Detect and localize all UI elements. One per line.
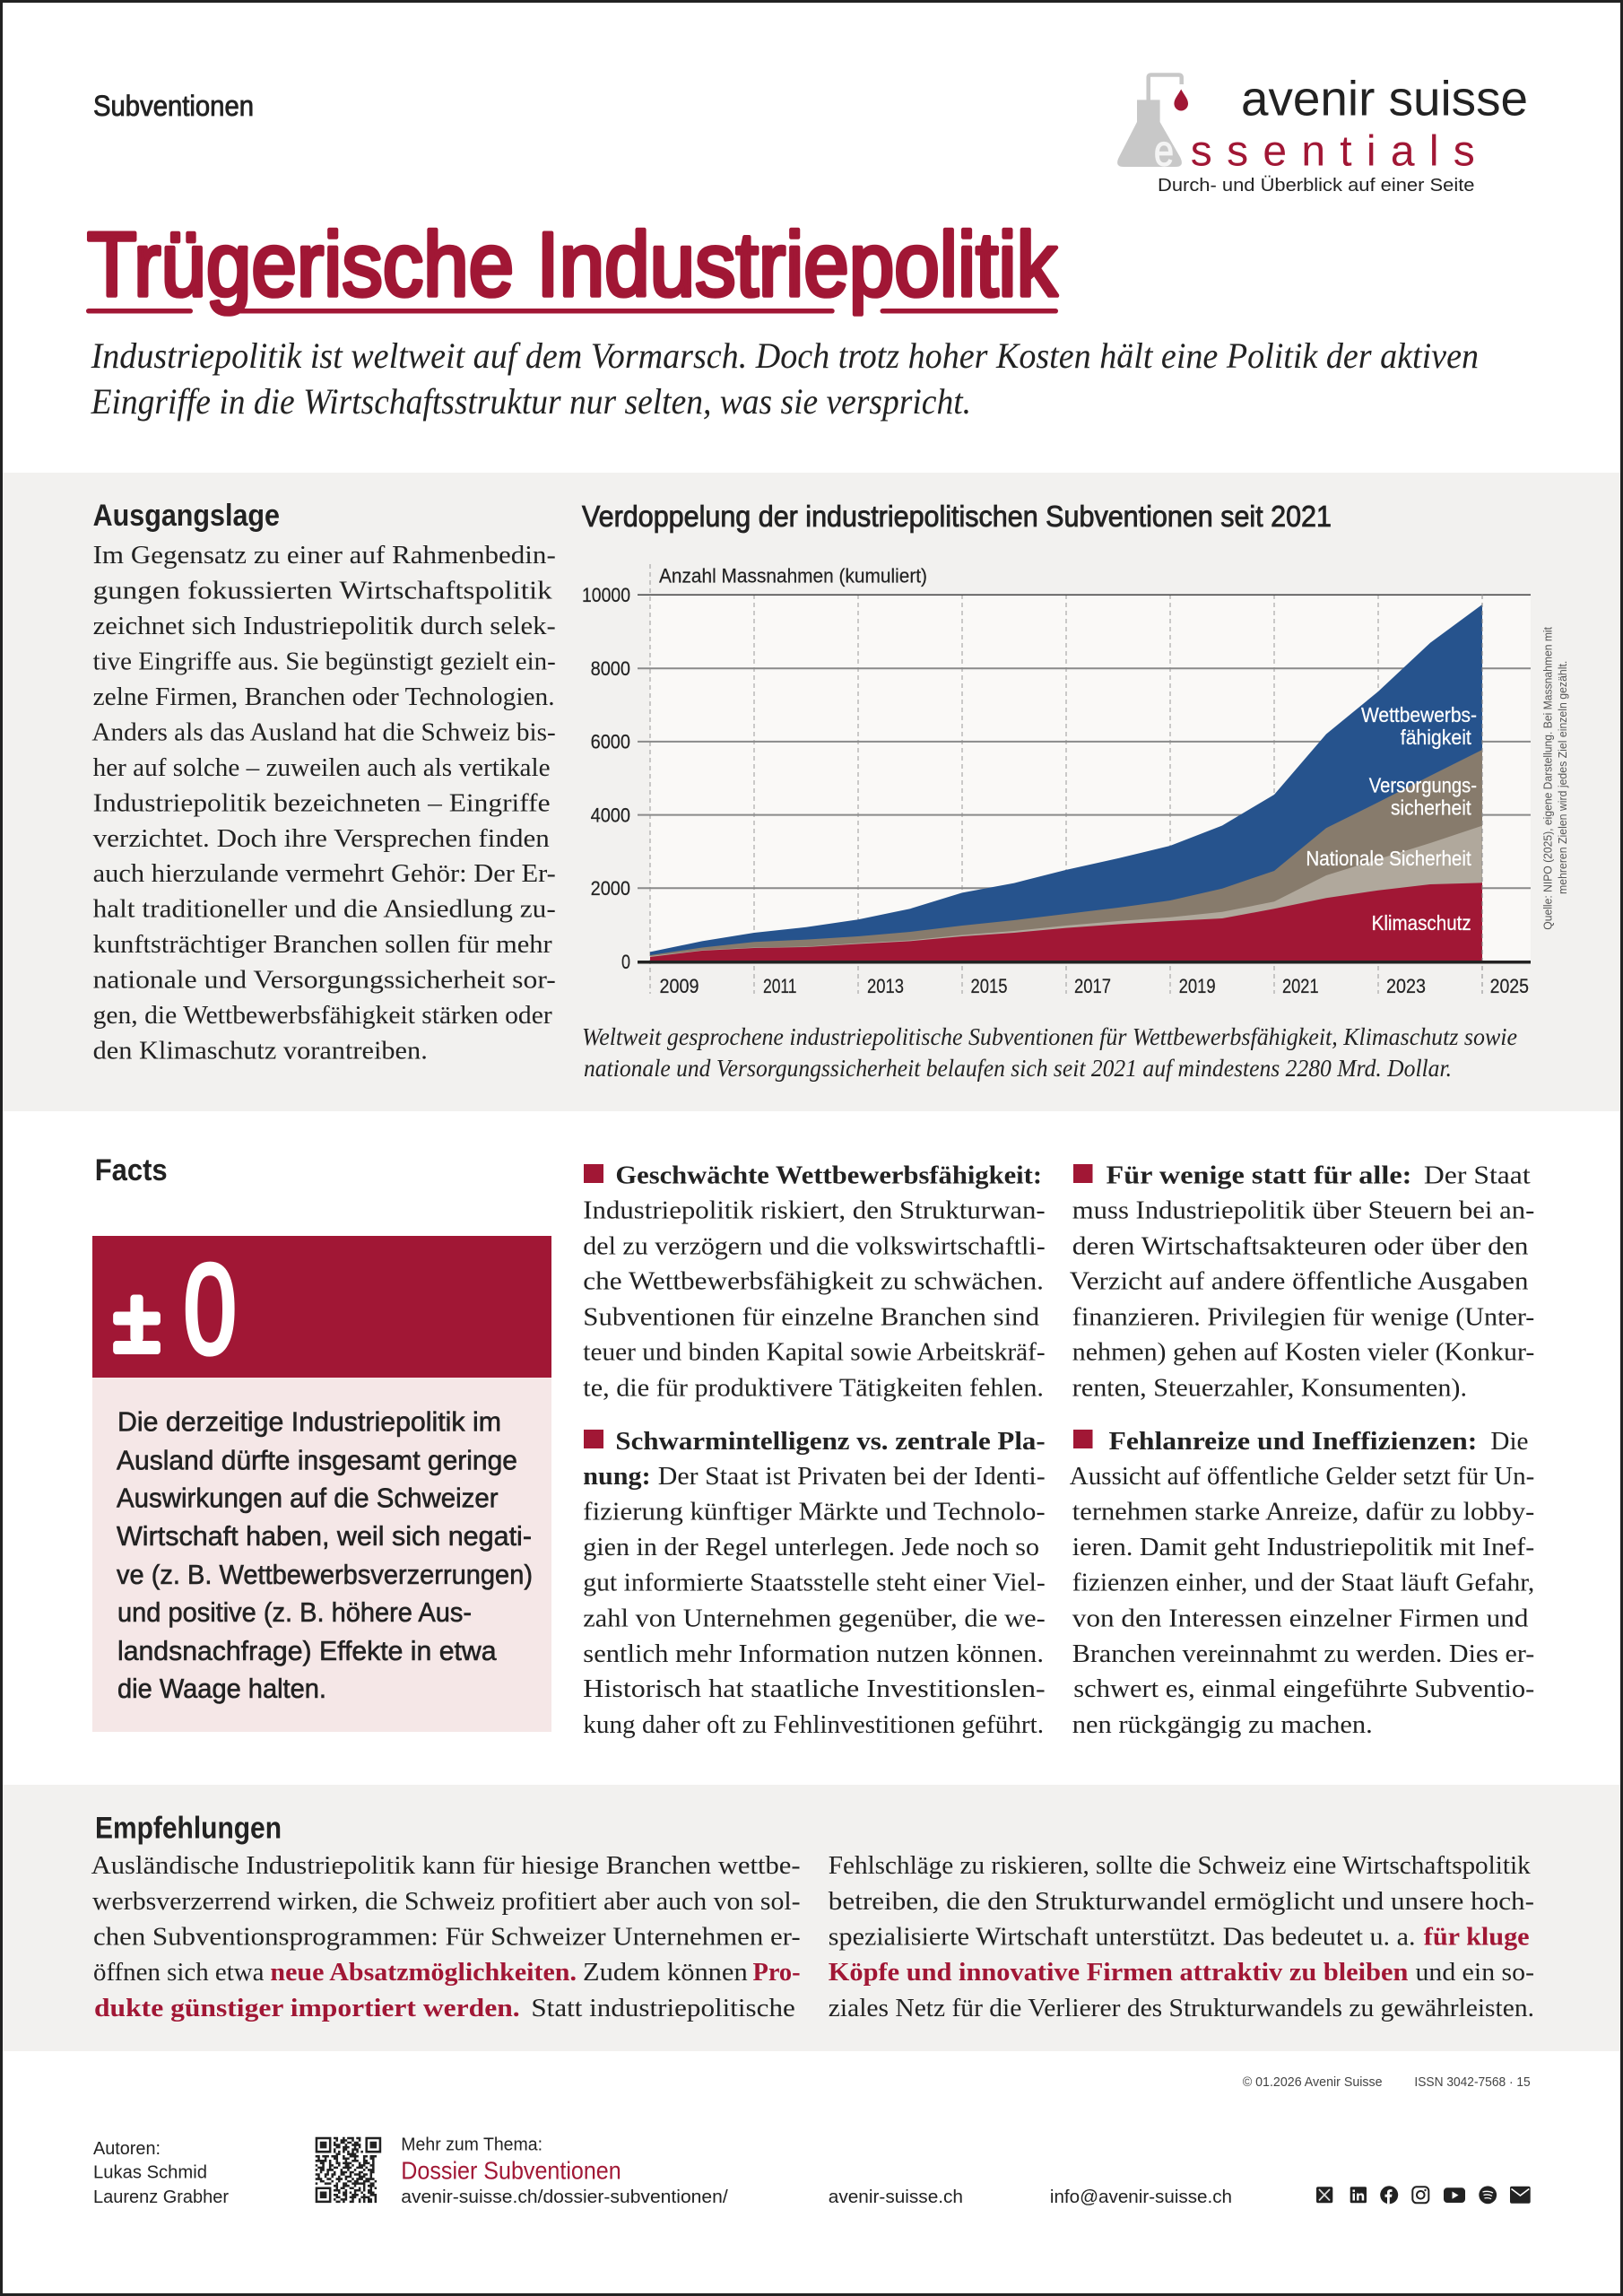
logo e: e xyxy=(1154,127,1174,175)
text block: Empfehlungen right: ziales Netz für die Verlierer des Strukturwandels zu gewährleisten. xyxy=(829,1994,1534,2022)
fact: Für wenige statt für alle: Der Staat xyxy=(1424,1161,1531,1189)
authors: Autoren: xyxy=(93,2139,161,2159)
website: avenir-suisse.ch xyxy=(829,2187,963,2207)
area: Wettbewerbsfähigkeit xyxy=(650,604,1482,961)
intro text: Eingriffe in die Wirtschaftsstruktur nur selten, was sie verspricht. xyxy=(91,381,971,422)
authors xyxy=(93,2139,229,2207)
fact: Geschwächte Wettbewerbsfähigkeit: che Wettbewerbsfähigkeit zu schwächen. xyxy=(583,1267,1044,1296)
area labels: Klimaschutz xyxy=(1372,911,1471,935)
icon: QR code xyxy=(316,2137,381,2203)
icon: flask xyxy=(1117,75,1188,167)
fact: Fehlanreize und Ineffizienzen xyxy=(1070,1427,1534,1739)
icon: X xyxy=(1316,2187,1332,2203)
key fact text: und positive (z. B. höhere Aus- xyxy=(117,1596,472,1628)
x axis labels: 2009 xyxy=(660,975,699,997)
authors: Laurenz Grabher xyxy=(93,2187,229,2207)
key fact text xyxy=(117,1406,533,1704)
authors: Lukas Schmid xyxy=(93,2162,207,2182)
bullet square xyxy=(584,1430,603,1448)
text block: Empfehlungen left: chen Subventionsprogrammen: Für Schweizer Unternehmen er- xyxy=(93,1923,801,1952)
key fact text: Auswirkungen auf die Schweizer xyxy=(117,1482,499,1514)
fact: Schwarmintelligenz xyxy=(583,1427,1046,1739)
logo essentials: ssentials xyxy=(1191,127,1475,175)
fact: Für wenige statt für alle: Für wenige statt für alle: xyxy=(1107,1161,1411,1189)
fact: Fehlanreize und Ineffizienzen: Branchen vereinnahmt zu werden. Dies er- xyxy=(1072,1639,1534,1668)
y axis labels: 4000 xyxy=(591,804,630,826)
fact: Schwarmintelligenz: gut informierte Staatsstelle steht einer Viel- xyxy=(583,1568,1046,1596)
area: Versorgungssicherheit xyxy=(650,750,1482,961)
title: Trügerische Industriepolitik xyxy=(87,215,1057,316)
fact: Schwarmintelligenz: Schwarmintelligenz vs. zentrale Pla- xyxy=(615,1427,1046,1456)
copyright and ISSN: ISSN 3042-7568 · 15 xyxy=(1414,2074,1531,2090)
fact: Geschwächte Wettbewerbsfähigkeit: Subventionen für einzelne Branchen sind xyxy=(583,1302,1040,1331)
area labels xyxy=(1306,703,1477,935)
x axis labels: 2013 xyxy=(867,975,904,997)
panel: key fact xyxy=(92,1236,551,1732)
fact: Geschwächte Wettbewerbsfähigkeit: Geschwächte Wettbewerbsfähigkeit: xyxy=(615,1161,1042,1189)
x axis labels: 2017 xyxy=(1074,975,1111,997)
x axis labels: 2025 xyxy=(1490,975,1529,997)
key fact text: Ausland dürfte insgesamt geringe xyxy=(117,1445,517,1476)
key fact text: ve (z. B. Wettbewerbsverzerrungen) xyxy=(117,1559,533,1590)
topic label: Subventionen xyxy=(93,90,254,122)
x axis line xyxy=(638,961,1531,963)
key fact number box xyxy=(92,1236,551,1378)
area labels: fähigkeit xyxy=(1401,726,1471,749)
area: Nationale Sicherheit xyxy=(650,826,1482,961)
y axis labels xyxy=(582,584,630,973)
icon: mail xyxy=(1510,2187,1531,2204)
text block: Empfehlungen left: neue Absatzmöglichkeiten. xyxy=(270,1958,577,1987)
fact: Fehlanreize und Ineffizienzen: ternehmen starke Anreize, dafür zu lobby- xyxy=(1072,1497,1534,1526)
intro text: Industriepolitik ist weltweit auf dem Vormarsch. Doch trotz hoher Kosten hält eine Politik der aktiven xyxy=(91,335,1479,376)
fact: Geschwächte Wettbewerbsfähigkeit: Industriepolitik riskiert, den Strukturwan- xyxy=(583,1196,1046,1225)
icon: Spotify xyxy=(1479,2186,1497,2204)
heading: Empfehlungen: Empfehlungen xyxy=(95,1812,282,1846)
bullet square xyxy=(584,1164,603,1183)
fact: Schwarmintelligenz: kung daher oft zu Fehlinvestitionen geführt. xyxy=(583,1710,1044,1739)
fact: Für wenige statt für alle xyxy=(1070,1161,1534,1402)
icon: YouTube xyxy=(1444,2187,1465,2203)
text block: Empfehlungen right: für kluge xyxy=(1424,1923,1530,1952)
text block: Ausgangslage: tive Eingriffe aus. Sie begünstigt gezielt ein- xyxy=(93,648,556,676)
fact: Geschwächte Wettbewerbsfähigkeit: del zu verzögern und die volkswirtschaftli- xyxy=(583,1231,1046,1260)
fact: Fehlanreize und Ineffizienzen: Fehlanreize und Ineffizienzen: xyxy=(1108,1427,1477,1456)
y axis labels: 8000 xyxy=(591,657,630,680)
text block: Ausgangslage xyxy=(91,541,556,1065)
text block: Empfehlungen right: Köpfe und innovative Firmen attraktiv zu bleiben xyxy=(829,1958,1408,1987)
text block: Empfehlungen right xyxy=(829,1851,1534,2022)
fact: Für wenige statt für alle: nehmen) gehen auf Kosten vieler (Konkur- xyxy=(1072,1338,1534,1367)
logo wordmark: avenir suisse xyxy=(1241,71,1528,126)
fact: Für wenige statt für alle: renten, Steuerzahler, Konsumenten). xyxy=(1072,1373,1467,1402)
source note xyxy=(1542,626,1569,930)
area labels: sicherheit xyxy=(1391,796,1471,819)
icon: Instagram xyxy=(1412,2187,1428,2203)
y axis labels: 2000 xyxy=(591,877,630,900)
text block: Ausgangslage: Im Gegensatz zu einer auf Rahmenbedin- xyxy=(93,541,556,570)
chart caption xyxy=(582,1023,1517,1082)
heading: Facts: Facts xyxy=(95,1153,168,1187)
area labels: Wettbewerbs- xyxy=(1361,703,1477,726)
text block: Empfehlungen right: spezialisierte Wirtschaft unterstützt. Das bedeutet u. a. xyxy=(829,1923,1415,1952)
area labels: Nationale Sicherheit xyxy=(1306,847,1471,870)
x axis labels: 2015 xyxy=(970,975,1008,997)
text block: Empfehlungen left: öffnen sich etwa xyxy=(93,1958,265,1987)
y axis labels: 10000 xyxy=(582,584,630,606)
fact: Für wenige statt für alle: finanzieren. Privilegien für wenige (Unter- xyxy=(1072,1302,1534,1331)
text block: Ausgangslage: nationale und Versorgungssicherheit sor- xyxy=(93,966,556,995)
key figure: ± xyxy=(114,1271,160,1370)
x axis labels: 2011 xyxy=(763,975,796,997)
fact: Geschwächte Wettbewerbsfähigkeit: teuer und binden Kapital sowie Arbeitskräf- xyxy=(583,1338,1046,1367)
text block: Empfehlungen right: und ein so- xyxy=(1415,1958,1534,1987)
fact: Geschwächte Wettbewerbsfähigkeit: te, die für produktivere Tätigkeiten fehlen. xyxy=(583,1373,1044,1402)
text block: Ausgangslage: auch hierzulande vermehrt Gehör: Der Er- xyxy=(93,859,556,888)
text block: Empfehlungen left: dukte günstiger importiert werden. xyxy=(94,1994,520,2022)
text block: Empfehlungen left xyxy=(91,1851,801,2022)
icon: Facebook xyxy=(1380,2186,1398,2204)
fact: Für wenige statt für alle: deren Wirtschaftsakteuren oder über den xyxy=(1072,1231,1529,1260)
fact: Fehlanreize und Ineffizienzen: von den Interessen einzelner Firmen und xyxy=(1072,1605,1529,1633)
social icons xyxy=(1316,2186,1531,2204)
fact: Schwarmintelligenz: fizierung künftiger Märkte und Technolo- xyxy=(583,1497,1046,1526)
fact: Schwarmintelligenz: nung: xyxy=(583,1462,651,1491)
text block: Empfehlungen left: Zudem können xyxy=(583,1958,748,1987)
panel: key fact: 0 xyxy=(184,1238,237,1381)
fact: Schwarmintelligenz: gien in der Regel unterlegen. Jede noch so xyxy=(583,1533,1039,1561)
key fact text: die Waage halten. xyxy=(117,1673,326,1704)
key fact text: Wirtschaft haben, weil sich negati- xyxy=(117,1520,532,1552)
axis title: Anzahl Massnahmen (kumuliert) xyxy=(659,564,927,587)
x axis labels xyxy=(660,975,1529,997)
text block: Ausgangslage: zelne Firmen, Branchen oder Technologien. xyxy=(93,683,555,711)
chart caption: nationale und Versorgungssicherheit belaufen sich seit 2021 auf mindestens 2280 Mrd. Dollar. xyxy=(584,1055,1452,1082)
text block: Ausgangslage: zeichnet sich Industriepolitik durch selek- xyxy=(93,612,556,640)
icon: LinkedIn xyxy=(1350,2187,1367,2203)
area chart xyxy=(582,564,1531,997)
intro text xyxy=(91,335,1479,422)
area labels: Versorgungs- xyxy=(1369,773,1477,796)
more on the topic: Mehr zum Thema: xyxy=(401,2135,542,2154)
fact: Geschwächte Wettbewerbsfähigkeit xyxy=(583,1161,1046,1402)
key fact text: landsnachfrage) Effekte in etwa xyxy=(117,1635,497,1666)
more on the topic: Dossier Subventionen xyxy=(401,2156,621,2184)
text block: Empfehlungen left: Ausländische Industriepolitik kann für hiesige Branchen wettbe- xyxy=(91,1851,801,1880)
key fact text: Die derzeitige Industriepolitik im xyxy=(117,1406,501,1438)
fact: Für wenige statt für alle: muss Industriepolitik über Steuern bei an- xyxy=(1072,1196,1534,1225)
text block: Empfehlungen left: Pro- xyxy=(753,1958,801,1987)
fact: Fehlanreize und Ineffizienzen: schwert es, einmal eingeführte Subventio- xyxy=(1073,1674,1534,1703)
panel: Ausgangslage and chart band xyxy=(0,473,1623,1111)
title underline xyxy=(86,309,1058,314)
heading: chart title: Verdoppelung der industriepolitischen Subventionen seit 2021 xyxy=(582,500,1332,533)
text block: Empfehlungen left: Statt industriepolitische xyxy=(531,1994,795,2022)
copyright and ISSN xyxy=(1243,2074,1531,2090)
more on the topic xyxy=(401,2135,728,2207)
chart caption: Weltweit gesprochene industriepolitische Subventionen für Wettbewerbsfähigkeit, Klimaschutz sowie xyxy=(582,1023,1517,1050)
bullet square xyxy=(1073,1164,1092,1183)
text block: Ausgangslage: gungen fokussierten Wirtschaftspolitik xyxy=(93,577,552,605)
plot background xyxy=(650,595,1531,961)
fact: Schwarmintelligenz: Der Staat ist Privaten bei der Identi- xyxy=(658,1462,1046,1491)
copyright and ISSN: © 01.2026 Avenir Suisse xyxy=(1243,2074,1383,2090)
text block: Ausgangslage: her auf solche – zuweilen auch als vertikale xyxy=(93,753,551,782)
bullet square xyxy=(1073,1430,1092,1448)
text block: Empfehlungen right: Fehlschläge zu riskieren, sollte die Schweiz eine Wirtschaftspolitik xyxy=(829,1851,1531,1880)
fact: Fehlanreize und Ineffizienzen: Aussicht auf öffentliche Gelder setzt für Un- xyxy=(1070,1462,1534,1491)
y axis labels: 0 xyxy=(621,951,630,973)
text block: Ausgangslage: halt traditioneller und die Ansiedlung zu- xyxy=(93,895,556,924)
text block: Ausgangslage: Anders als das Ausland hat die Schweiz bis- xyxy=(91,718,556,746)
source note: mehreren Zielen wird jedes Ziel einzeln gezählt. xyxy=(1557,661,1569,894)
x axis labels: 2023 xyxy=(1386,975,1426,997)
text block: Ausgangslage: kunftsträchtiger Branchen sollen für mehr xyxy=(93,930,552,959)
x axis labels: 2021 xyxy=(1282,975,1319,997)
fact: Für wenige statt für alle: Verzicht auf andere öffentliche Ausgaben xyxy=(1070,1267,1529,1296)
source note: Quelle: NIPO (2025), eigene Darstellung. Bei Massnahmen mit xyxy=(1542,626,1555,930)
email: info@avenir-suisse.ch xyxy=(1050,2187,1232,2207)
text block: Ausgangslage: den Klimaschutz vorantreiben. xyxy=(93,1037,428,1065)
panel: Empfehlungen band xyxy=(0,1785,1623,2051)
y axis labels: 6000 xyxy=(591,731,630,753)
fact: Schwarmintelligenz: zahl von Unternehmen gegenüber, die we- xyxy=(583,1605,1046,1633)
text block: Ausgangslage: verzichtet. Doch ihre Versprechen finden xyxy=(93,824,550,853)
text block: Empfehlungen right: betreiben, die den Strukturwandel ermöglicht und unsere hoch- xyxy=(829,1887,1534,1916)
x axis labels: 2019 xyxy=(1179,975,1216,997)
fact: Schwarmintelligenz: sentlich mehr Information nutzen können. xyxy=(583,1639,1044,1668)
logo: avenir suisse essentials xyxy=(1117,71,1528,196)
fact: Schwarmintelligenz: Historisch hat staatliche Investitionslen- xyxy=(583,1674,1046,1703)
text block: Ausgangslage: gen, die Wettbewerbsfähigkeit stärken oder xyxy=(93,1001,552,1030)
heading: Ausgangslage: Ausgangslage xyxy=(93,499,280,533)
fact: Fehlanreize und Ineffizienzen: ieren. Damit geht Industriepolitik mit Inef- xyxy=(1072,1533,1534,1561)
fact: Fehlanreize und Ineffizienzen: fizienzen einher, und der Staat läuft Gefahr, xyxy=(1072,1568,1534,1596)
key fact text box xyxy=(92,1378,551,1732)
fact: Fehlanreize und Ineffizienzen: nen rückgängig zu machen. xyxy=(1072,1710,1373,1739)
text block: Empfehlungen left: werbsverzerrend wirken, die Schweiz profitiert aber auch von sol- xyxy=(92,1887,801,1916)
area: Klimaschutz xyxy=(650,883,1482,961)
fact: Fehlanreize und Ineffizienzen: Die xyxy=(1490,1427,1528,1456)
text block: Ausgangslage: Industriepolitik bezeichneten – Eingriffe xyxy=(93,788,551,817)
more on the topic: avenir-suisse.ch/dossier-subventionen/ xyxy=(401,2187,728,2207)
logo tagline: Durch- und Überblick auf einer Seite xyxy=(1158,176,1474,196)
